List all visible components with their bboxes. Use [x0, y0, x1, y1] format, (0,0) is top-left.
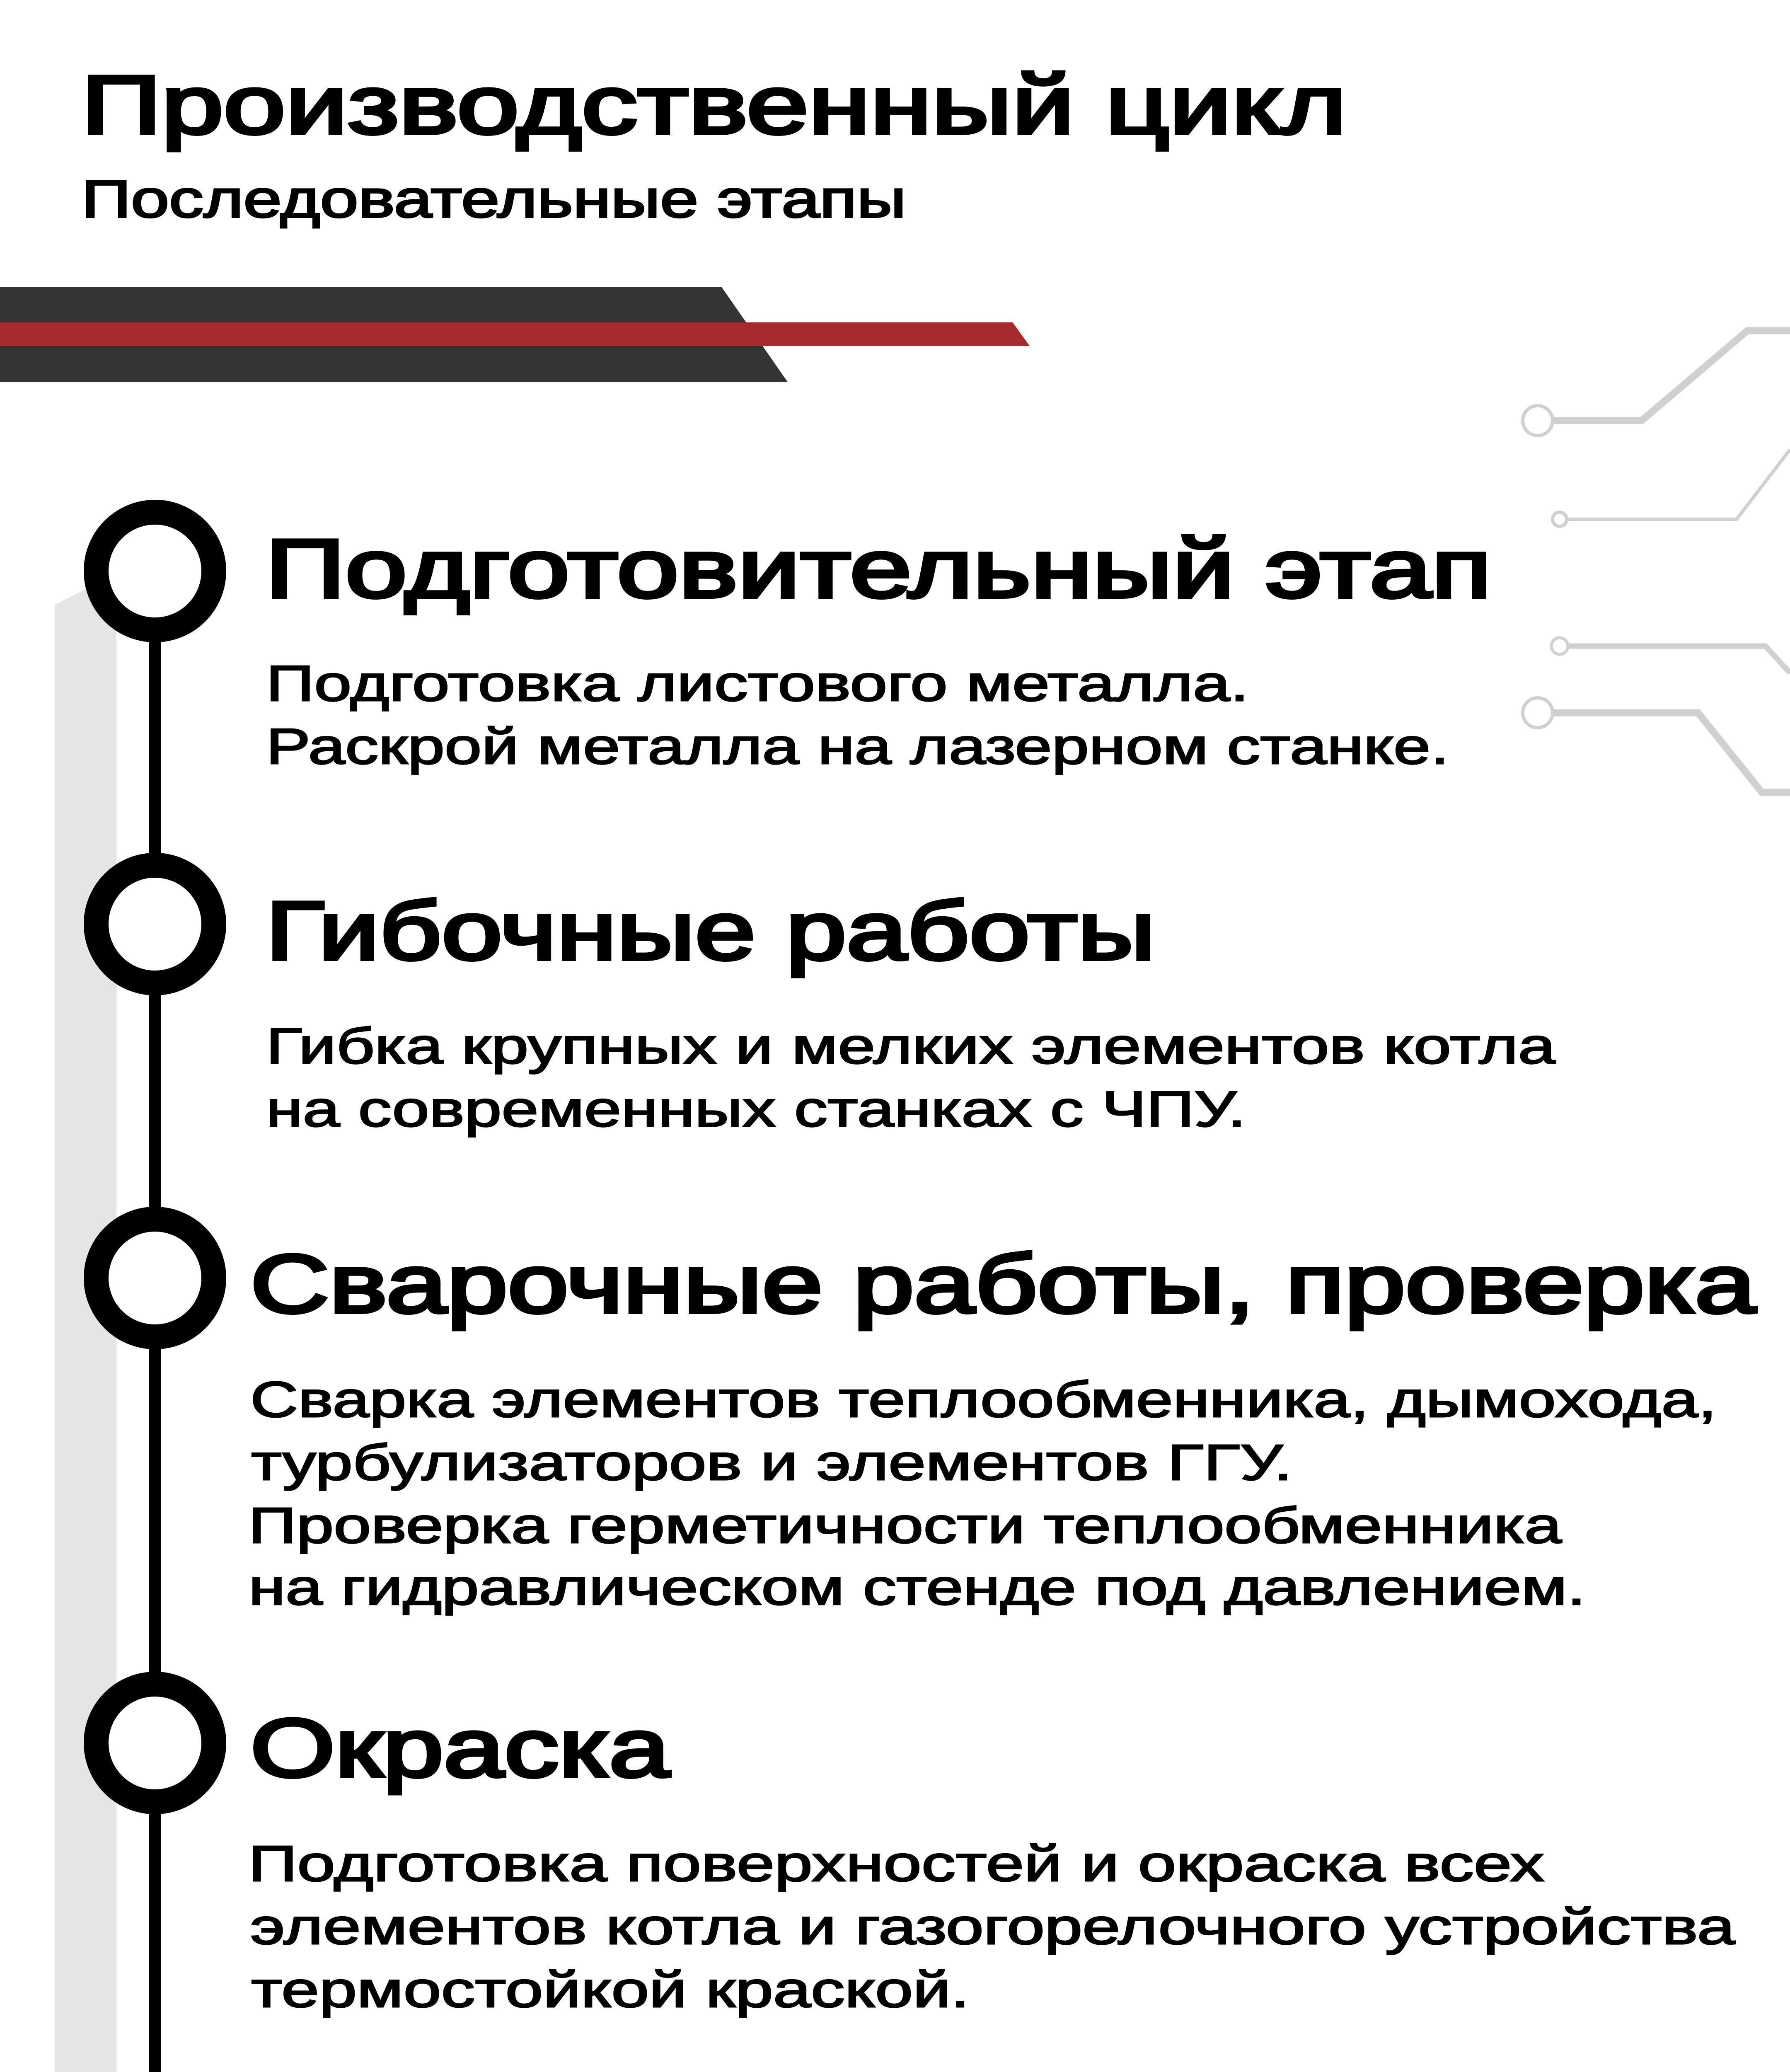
- step 1: Раскрой металла на лазерном станке.: [266, 718, 1449, 775]
- step 2: [266, 885, 1555, 1137]
- step 3: на гидравлическом стенде под давлением.: [249, 1559, 1586, 1615]
- timeline line: [149, 571, 161, 2072]
- step 3: [248, 1238, 1756, 1615]
- step 3: Проверка герметичности теплообменника: [248, 1497, 1562, 1554]
- header ribbon: [0, 287, 1030, 382]
- step 2: Гибка крупных и мелких элементов котла: [266, 1018, 1555, 1074]
- step 1: Подготовка листового металла.: [266, 655, 1249, 712]
- step 1: [265, 523, 1492, 775]
- step 3: турбулизаторов и элементов ГГУ.: [251, 1434, 1292, 1491]
- step 4: элементов котла и газогорелочного устройства: [250, 1898, 1735, 1955]
- step 2: на современных станках с ЧПУ.: [266, 1081, 1246, 1137]
- step 4: [248, 1702, 1735, 2018]
- step 3: Сварка элементов теплообменника, дымохода,: [250, 1371, 1717, 1428]
- step 2: Гибочные работы: [266, 885, 1156, 977]
- step 4: термостойкой краской.: [251, 1961, 970, 2018]
- step 3: Сварочные работы, проверка: [250, 1238, 1756, 1330]
- step 4: Окраска: [250, 1702, 670, 1794]
- step 4: Подготовка поверхностей и окраска всех: [248, 1835, 1544, 1892]
- timeline markers: [96, 512, 214, 2072]
- step 1: Подготовительный этап: [265, 523, 1492, 615]
- circuit decoration: [1523, 331, 1790, 792]
- title: Производственный цикл: [81, 59, 1347, 151]
- subtitle: Последовательные этапы: [82, 169, 906, 229]
- grey vertical band: [55, 574, 116, 2072]
